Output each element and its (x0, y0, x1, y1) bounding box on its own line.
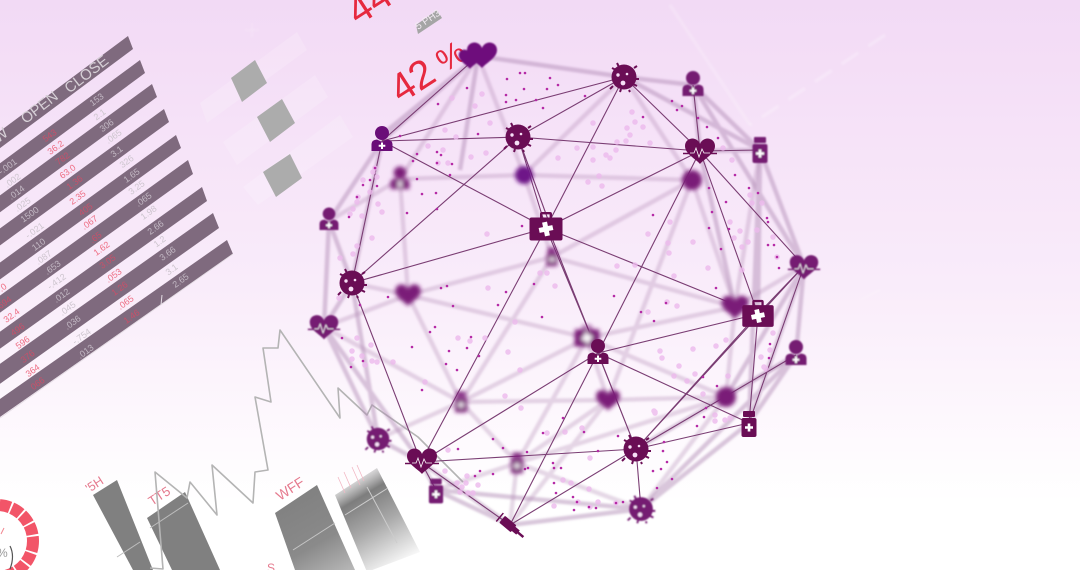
table values: 376 (19, 348, 37, 365)
table values: 405 (77, 201, 95, 218)
icon: heart left (308, 315, 340, 339)
gauge (0, 505, 33, 570)
table values: 153 (88, 91, 106, 108)
network sphere (308, 42, 820, 541)
faint back mesh (324, 56, 804, 525)
table values: .002 (3, 171, 23, 190)
table values: 1.2 (152, 234, 168, 249)
table values: 2.66 (146, 218, 166, 237)
soft outer nodes (308, 42, 820, 523)
table values: 110 (30, 236, 47, 253)
icon: virus lower left (365, 426, 392, 452)
table values: 1.36 (65, 173, 85, 192)
table header: CLOSE (61, 52, 112, 97)
table values: 496 (9, 321, 27, 338)
front nodes (338, 63, 774, 541)
table values: .013 (76, 342, 96, 361)
particles light (339, 94, 777, 507)
table values: 543 (41, 127, 59, 144)
table values: 3.1 (109, 144, 125, 159)
table values: .014 (7, 183, 27, 202)
fading bar (335, 468, 420, 570)
table values: .065 (116, 293, 136, 312)
bar TT5 (147, 492, 220, 570)
table values: .053 (104, 266, 124, 285)
icon: back heart (395, 284, 421, 306)
bar chart: '5H (83, 474, 106, 496)
table header: OPEN (18, 88, 62, 127)
icon: bottle top right (752, 137, 768, 163)
table values: 1.26 (110, 279, 130, 298)
particles dark (342, 73, 779, 510)
icon: heart pulse lower left (405, 448, 439, 474)
icon: back bottle bottom (511, 453, 523, 473)
bar chart: TT5 (145, 483, 173, 509)
table values: 63.0 (58, 162, 78, 181)
icon: heart pulse right (788, 255, 820, 279)
icon: back virus low (716, 387, 736, 407)
icon: back case (575, 325, 599, 347)
icon: bottle bottom left (429, 479, 443, 503)
icon: virus upper (504, 123, 533, 152)
icon: syringe (496, 513, 526, 541)
bar chart: WFF (273, 474, 307, 504)
table values: 1500 (19, 205, 41, 224)
icon: person left (320, 208, 338, 230)
table values: .025 (13, 195, 33, 214)
ticker tag PH3: 5 PH3 (414, 8, 443, 32)
icon: bottle lower right (742, 411, 756, 437)
table values: 2.65 (171, 271, 191, 290)
icon: back heart right (722, 296, 748, 319)
table values: .067 (80, 213, 100, 232)
table values: 3.66 (158, 244, 178, 263)
thin front lines (352, 56, 804, 525)
table values: 2.1 (92, 107, 108, 122)
table values: 3.05 (98, 252, 118, 271)
table values: 3.25 (127, 178, 147, 197)
table values: 1.98 (139, 203, 159, 222)
table values: 1.46 (122, 307, 142, 326)
table values: .036 (63, 313, 83, 332)
table values: 2.35 (68, 188, 88, 207)
table values: 1.65 (122, 166, 142, 185)
back nodes blurred (391, 166, 748, 473)
table values: 306 (98, 117, 116, 134)
table values: .012 (52, 286, 72, 305)
table values: 326 (118, 153, 136, 170)
icon: medical case centre (530, 212, 562, 240)
table values: -.412 (45, 271, 68, 292)
icon: back node right (682, 170, 702, 190)
grey squares (231, 60, 302, 197)
table rows (0, 36, 233, 431)
red value 42%: % (429, 33, 473, 79)
table values: 1.62 (92, 239, 112, 258)
table values (0, 91, 191, 392)
table values: 596 (14, 334, 32, 351)
icon: back bottle low (455, 392, 467, 412)
icon: back person (391, 166, 409, 189)
table values: .065 (104, 127, 124, 146)
bar 5H (93, 480, 153, 570)
bar chart (83, 465, 420, 570)
line chart (150, 330, 463, 569)
icon: top heart (459, 42, 497, 69)
table values: .653 (43, 258, 63, 277)
table values: 32.4 (2, 306, 22, 325)
icon: virus bottom (628, 496, 655, 523)
table values: 066 (29, 375, 47, 392)
table values: 36.2 (46, 138, 66, 157)
table values: 3.1 (164, 262, 180, 277)
table values: -.021 (23, 220, 46, 241)
light streaks (245, 5, 885, 300)
table edge lines (0, 254, 233, 418)
icon: back bottle (547, 248, 557, 266)
pale strips behind grey squares (200, 32, 353, 205)
table values: .045 (58, 299, 78, 318)
table values: .087 (34, 248, 54, 267)
icon: virus left (338, 269, 367, 298)
table values: .65 (88, 230, 104, 245)
bar WFF (275, 485, 355, 570)
icon: virus top (610, 63, 639, 92)
icon: medical case right (742, 300, 774, 327)
table values: .065 (134, 190, 154, 209)
table values: 782 (54, 150, 72, 167)
icon: person top right (682, 71, 704, 96)
table values: -.754 (70, 326, 93, 347)
icon: back node top (515, 166, 533, 184)
red value 42% (382, 33, 473, 112)
red value 42%: 42 (382, 50, 443, 112)
table values: 364 (24, 362, 42, 379)
icon: heart pulse upper right (683, 138, 717, 164)
icon: person right (786, 340, 806, 365)
icon: nurse centre (588, 339, 608, 364)
icon: nurse upper left (372, 126, 392, 151)
data table rotated in perspective (0, 36, 233, 431)
table header (0, 52, 112, 147)
icon: virus lower (622, 435, 651, 464)
icon: back heart low (596, 390, 620, 410)
